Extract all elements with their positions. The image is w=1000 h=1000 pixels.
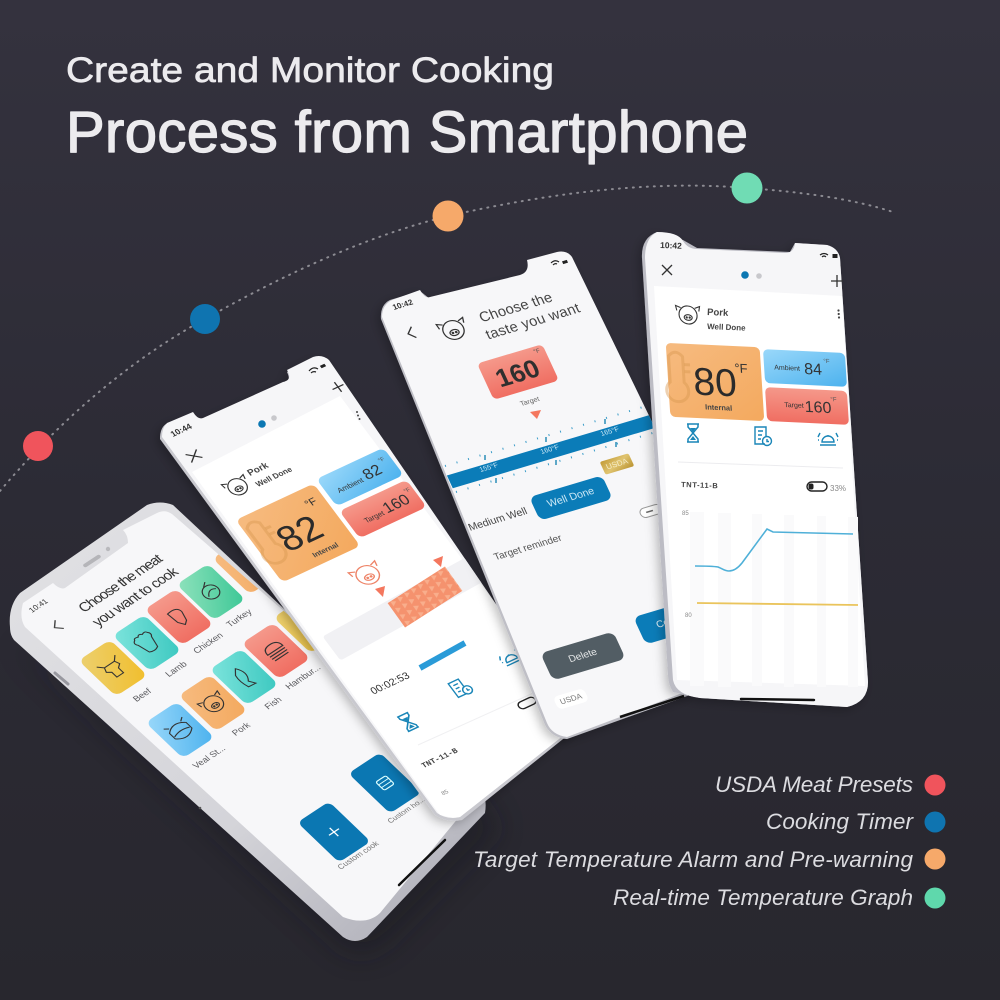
phone 2 divider	[418, 690, 540, 745]
card: fish	[212, 651, 276, 703]
USDA note: USDA	[558, 692, 584, 706]
title	[66, 51, 748, 165]
card labels: Chicken	[191, 631, 225, 655]
target label: Target	[519, 396, 541, 408]
card: veal	[148, 704, 212, 756]
alarm bell icon	[818, 433, 838, 445]
temperature scale: 160°F	[539, 443, 560, 456]
USDA note	[560, 694, 582, 704]
phone 2 add icon	[329, 380, 347, 394]
card: pork	[182, 677, 244, 729]
title: Process from Smartphone	[66, 100, 748, 165]
phone 4 pork header	[676, 305, 746, 333]
phone 1: meat selection: Custom cook	[336, 839, 381, 871]
legend item: Cooking Timer: Cooking Timer	[766, 809, 914, 834]
ambient card: 84	[804, 361, 823, 379]
well done button	[531, 477, 611, 519]
delete button	[542, 633, 624, 679]
temperature graph: 80	[685, 613, 692, 619]
list clock icon	[755, 427, 772, 446]
phone 4 home bar	[741, 699, 814, 700]
phone 2 menu dots	[356, 411, 360, 420]
target card: Target	[784, 402, 804, 410]
phone 3 heading: taste you want	[483, 301, 583, 343]
legend item: USDA Meat Presets: USDA Meat Presets	[715, 772, 913, 797]
ambient card: Ambient	[335, 476, 366, 495]
temperature graph: 85	[682, 511, 689, 517]
phone 2 pork header	[221, 460, 295, 499]
phone 4 close icon	[662, 265, 672, 275]
card: turkey	[180, 566, 242, 618]
ambient card: °F	[377, 457, 387, 464]
probe name: TNT-11-B	[681, 480, 719, 490]
phone 1 heading: Choose the meat	[75, 552, 167, 616]
target card	[339, 480, 427, 538]
phone 3 pig icon	[436, 317, 471, 343]
meat cards	[82, 554, 315, 756]
USDA gold badge	[600, 453, 634, 475]
delete button: Delete	[567, 647, 600, 665]
custom button 2	[348, 753, 422, 813]
gray range band	[323, 558, 483, 660]
phone 1 home bar	[399, 840, 445, 885]
card labels: Veal St...	[190, 744, 228, 770]
card labels: Lamb	[163, 659, 189, 679]
temperature scale	[444, 406, 666, 704]
card labels	[131, 607, 323, 770]
phone 2: cooking monitor	[160, 356, 590, 821]
timer value: 00:02:53	[369, 671, 412, 697]
card labels: Fish	[262, 695, 284, 711]
phone 4 pork header: Well Done	[707, 322, 746, 333]
internal temperature card: 82	[268, 508, 332, 560]
phone 4 pork header: Pork	[707, 307, 729, 319]
card labels: Beef	[131, 686, 154, 704]
phone 3 back arrow	[406, 327, 416, 339]
USDA gold badge: USDA	[604, 457, 630, 471]
well done button: Well Done	[546, 486, 597, 510]
card: lamb	[116, 617, 178, 669]
phone 2 white panel	[192, 396, 590, 820]
temperature scale: 165°F	[599, 425, 620, 438]
probe name: TNT-11-B	[420, 747, 460, 771]
internal temperature card	[664, 343, 764, 421]
progress bar	[420, 643, 465, 668]
phone 2 pork header: Well Done	[254, 465, 295, 489]
target card: °F	[830, 397, 837, 403]
red pig icon	[348, 561, 387, 589]
phone 1 shadow	[10, 640, 500, 954]
ambient card: °F	[823, 359, 830, 365]
phone 2 status bar: 10:44	[168, 421, 194, 439]
ambient card	[763, 349, 847, 387]
internal temperature card: Internal	[705, 402, 732, 413]
dotted arc with feature markers	[0, 172, 893, 491]
phone 2: cooking monitor: 85	[441, 789, 451, 797]
phone 2 list icon	[448, 677, 474, 699]
custom cook button	[297, 802, 371, 862]
phone 1 status: 10:41	[27, 597, 51, 614]
target card: Target	[362, 508, 387, 525]
legend	[473, 772, 946, 910]
internal temperature card: °F	[734, 361, 748, 376]
phone 4 white panel	[654, 286, 865, 686]
card: beef	[82, 642, 144, 694]
phone 4 divider	[678, 462, 843, 468]
target card	[765, 387, 849, 425]
battery status	[807, 482, 846, 493]
internal temperature card: °F	[302, 496, 320, 510]
legend item: Real-time Temperature Graph: Real-time Temperature Graph	[613, 885, 913, 910]
reminder toggle	[640, 504, 658, 518]
target temperature card: °F	[533, 348, 542, 355]
phone 4 status bar: 10:42	[660, 240, 682, 251]
card labels: Pork	[230, 720, 253, 738]
phone 1: meat selection	[10, 502, 490, 941]
card labels: Hambur...	[283, 663, 323, 691]
internal temperature card: 80	[692, 361, 738, 405]
phone 2 hourglass icon	[397, 712, 419, 732]
phone 2 pork header: Pork	[245, 460, 272, 478]
card: chicken	[148, 591, 210, 643]
range markers	[375, 556, 443, 597]
confirm button: Confirm	[655, 611, 693, 631]
phone 1 back arrow	[50, 620, 64, 632]
title: Create and Monitor Cooking	[66, 51, 554, 90]
medium well option: Medium Well	[467, 506, 529, 534]
ambient card: 82	[360, 462, 386, 483]
battery status: 33%	[830, 484, 846, 493]
phone 1 heading: you want to cook	[89, 564, 183, 630]
target card: 160	[804, 399, 832, 417]
hourglass icon	[687, 424, 699, 442]
phone 3 home bar	[620, 696, 684, 717]
phone 1 speaker	[82, 554, 102, 568]
temperature graph	[682, 511, 858, 687]
card: hamburger	[244, 625, 308, 677]
phone 3 heading: Choose the	[477, 290, 555, 326]
phone 2 battery toggle	[516, 696, 538, 710]
card labels: Turkey	[224, 607, 254, 629]
ambient card: Ambient	[774, 365, 800, 373]
phone 2 bell icon	[498, 649, 523, 667]
internal temperature card: Internal	[310, 541, 340, 559]
hatched target range	[388, 566, 462, 628]
phone 4: temperature graph	[642, 232, 868, 707]
confirm button	[636, 608, 666, 643]
target card: °F	[403, 487, 412, 495]
internal temperature card	[236, 484, 360, 582]
phone 2 close icon	[186, 449, 202, 463]
phone 1 side button	[55, 673, 68, 684]
phone 3: taste selection	[381, 252, 719, 739]
phone 4 menu dots	[837, 309, 840, 319]
target temperature card: 160	[490, 353, 545, 393]
target marker	[530, 410, 541, 419]
phone 4 add icon	[831, 275, 843, 287]
temperature scale: 155°F	[478, 461, 499, 474]
target reminder label: Target reminder	[492, 533, 564, 563]
phone 1: meat selection: Custom ho...	[385, 795, 427, 825]
phone 3 time: 10:42	[391, 298, 415, 312]
ambient card	[316, 448, 404, 506]
legend item: Target Temperature Alarm and Pre-warning: Target Temperature Alarm and Pre-warning	[473, 847, 913, 872]
target temperature card	[477, 344, 559, 400]
target card: 160	[379, 492, 414, 517]
